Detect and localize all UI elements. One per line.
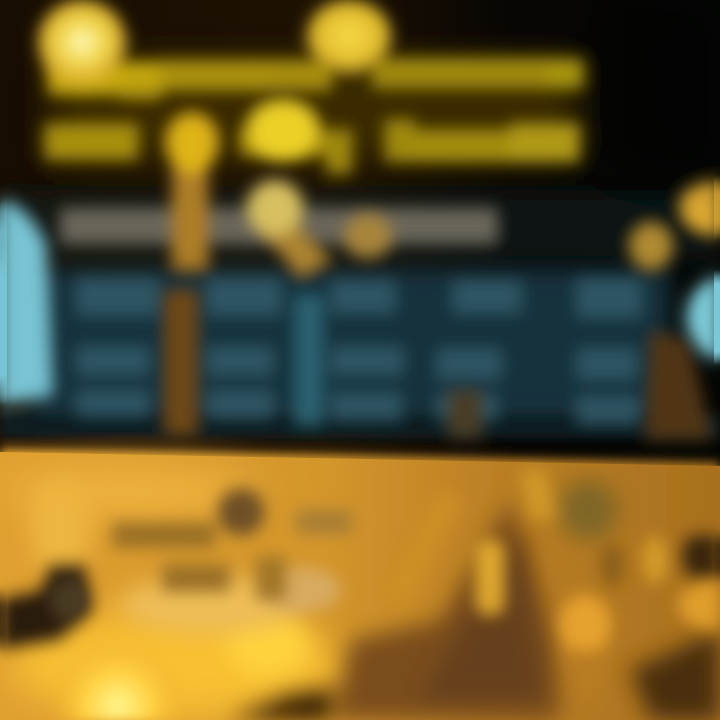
- brown vertical posts: [164, 290, 712, 440]
- right cyan edge: [714, 270, 720, 365]
- floor highlight left: [5, 466, 255, 518]
- orb: right small amber light: [629, 222, 673, 270]
- bottom-centre shadow: [335, 500, 560, 720]
- floor base: [0, 452, 720, 720]
- title line 1: [48, 58, 584, 98]
- teal haze behind subtitle: [0, 190, 720, 260]
- panel columns: [76, 278, 642, 425]
- orb: subtitle pale light: [247, 180, 303, 236]
- vertical amber stem: [166, 113, 332, 278]
- subtitle grey bar: [60, 208, 498, 244]
- dark shapes on floor: [0, 480, 720, 720]
- right cyan panel: [686, 275, 720, 362]
- orb: top-left bright light: [38, 0, 126, 84]
- left dark object: [0, 565, 92, 650]
- floor light streaks: [385, 470, 720, 700]
- orb: top-center yellow light: [307, 0, 391, 72]
- golden floor: [0, 448, 720, 720]
- orb: subtitle amber light: [344, 214, 392, 258]
- left cyan edge: [0, 200, 7, 405]
- dark background: [0, 0, 720, 480]
- right dark object: [681, 535, 720, 580]
- left cyan panel: [0, 200, 52, 405]
- left dark edge: [0, 585, 6, 655]
- top-right dark corner: [600, 0, 720, 180]
- floor bright pool: [10, 611, 340, 719]
- orb: right amber light: [680, 180, 720, 236]
- orb: mid-title yellow light: [247, 100, 319, 160]
- lower-right shadow: [630, 630, 720, 720]
- floor glare: [48, 640, 188, 720]
- right dark edge: [714, 530, 720, 584]
- title glow: [50, 60, 580, 160]
- light orbs: [38, 0, 720, 270]
- upper-right grey marks: [558, 480, 618, 540]
- title line 2: [44, 120, 580, 174]
- floor pale area: [120, 577, 300, 633]
- right amber edge: [714, 176, 720, 240]
- title: [44, 58, 584, 174]
- wall: teal panel band: [0, 268, 720, 438]
